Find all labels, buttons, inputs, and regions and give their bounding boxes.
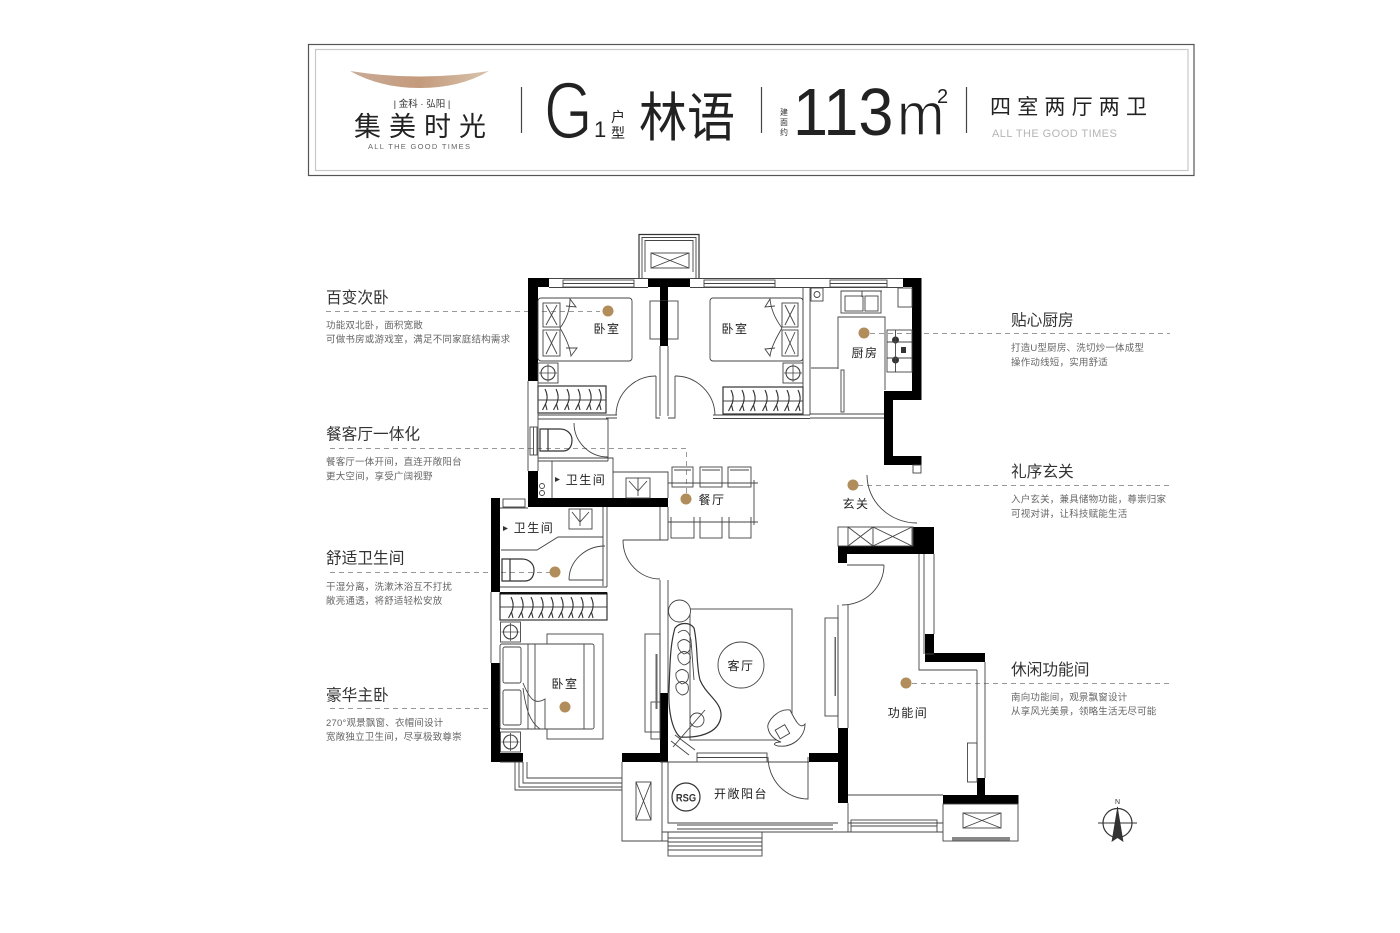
callout: leisure room: 南向功能间，观景飘窗设计	[1011, 692, 1128, 704]
location dots	[550, 306, 912, 712]
side table	[671, 710, 705, 755]
area number: 2	[937, 86, 948, 108]
folded sheet	[560, 299, 577, 356]
rug	[690, 609, 792, 740]
balcony	[622, 753, 943, 856]
room labels: 卧室	[721, 321, 749, 336]
nightstand	[783, 363, 803, 383]
plan code G1: 1	[594, 117, 606, 142]
upper bathroom	[528, 381, 668, 498]
bed	[538, 298, 632, 361]
bed	[500, 644, 594, 729]
room labels: 玄关	[842, 496, 870, 511]
bed	[710, 298, 803, 361]
room circle	[718, 642, 764, 688]
bedroom one furniture	[538, 298, 632, 418]
plan name: 林语	[639, 88, 735, 148]
room labels: 卫生间	[514, 521, 554, 535]
callout: ceremonial entrance: 礼序玄关	[1011, 463, 1074, 481]
pillows	[782, 303, 798, 356]
room labels	[514, 321, 928, 801]
bedroom two furniture	[710, 298, 810, 418]
callout: flexible second bedroom: 可做书房或游戏室，满足不同家庭结构需求	[326, 334, 511, 346]
icon: north compass	[1098, 799, 1137, 842]
callout: flexible second bedroom	[326, 289, 511, 346]
wardrobe	[538, 386, 606, 413]
logo: gold arc	[350, 71, 489, 88]
callout: comfortable bathroom	[326, 550, 452, 607]
icon: north compass: N	[1115, 799, 1120, 806]
area number: 113	[793, 74, 893, 149]
nightstand	[538, 363, 558, 383]
stove	[887, 330, 912, 372]
room labels: 功能间	[888, 706, 928, 720]
living room partition	[500, 540, 668, 762]
area number	[793, 74, 948, 149]
dining set	[668, 467, 758, 538]
armchair	[768, 710, 805, 746]
callout: considerate kitchen: 操作动线短，实用舒适	[1011, 356, 1108, 368]
floor lamp	[668, 600, 690, 622]
callout: comfortable bathroom: 敞亮通透，将舒适轻松安放	[326, 595, 443, 607]
dashed leader lines	[326, 312, 1170, 708]
room labels: 开敞阳台	[714, 786, 768, 801]
callout: considerate kitchen: 贴心厨房	[1011, 312, 1074, 330]
callout: considerate kitchen	[1011, 312, 1144, 368]
wash basin area	[613, 472, 668, 498]
logo: developer line: | 金科 · 弘阳 |	[394, 98, 450, 110]
TV cabinet	[645, 634, 660, 739]
central partition and doors	[616, 301, 715, 418]
callout: leisure room	[1011, 661, 1157, 718]
callout: comfortable bathroom: 舒适卫生间	[326, 550, 404, 568]
shower head	[555, 477, 560, 482]
divider two	[760, 87, 762, 133]
RSG marker	[672, 783, 700, 811]
callout: integrated dining and living	[326, 426, 462, 482]
sliding door	[697, 753, 767, 762]
logo: project name: 集美时光	[354, 112, 494, 142]
callout: luxury master bedroom	[326, 686, 462, 743]
toilet	[540, 429, 572, 451]
southeast air conditioning ledge	[943, 804, 1018, 841]
top chairs	[672, 467, 751, 487]
floor plan	[491, 234, 1018, 856]
callout: luxury master bedroom: 豪华主卧	[326, 686, 389, 704]
area prefix	[780, 107, 788, 137]
room labels: 卫生间	[566, 473, 606, 487]
room labels: 餐厅	[698, 492, 726, 507]
callout: integrated dining and living: 餐客厅一体化	[326, 426, 420, 444]
entry wall details	[838, 465, 921, 546]
plan type label	[611, 109, 625, 141]
divider one	[520, 87, 522, 133]
toilet	[502, 559, 534, 581]
divider three	[966, 87, 968, 133]
plan code G1: G	[544, 67, 593, 156]
callout: luxury master bedroom: 270°观景飘窗、衣帽间设计	[326, 717, 444, 729]
pillows	[543, 303, 560, 356]
bottom chairs	[671, 517, 751, 538]
English tagline: ALL THE GOOD TIMES	[992, 128, 1117, 140]
top windows	[549, 278, 903, 288]
functional room outline	[838, 554, 985, 832]
door	[538, 418, 608, 461]
north air conditioning ledge	[639, 234, 699, 278]
wardrobe	[723, 387, 803, 414]
logo: English slogan: ALL THE GOOD TIMES	[368, 142, 471, 151]
room labels: 卧室	[551, 676, 579, 691]
master bay window	[515, 762, 622, 790]
sofa	[669, 624, 721, 737]
room labels: 卧室	[593, 321, 621, 336]
steps	[668, 832, 762, 856]
nightstands	[500, 622, 520, 752]
callout: ceremonial entrance	[1011, 463, 1167, 520]
sink	[841, 291, 882, 313]
table	[668, 480, 758, 525]
callout: leisure room: 从享风光美景，领略生活无尽可能	[1011, 706, 1157, 718]
room labels: 厨房	[851, 345, 879, 360]
area number: m	[897, 82, 944, 148]
right TV cabinet	[825, 618, 838, 716]
callout: flexible second bedroom: 功能双北卧，面积宽敞	[326, 320, 423, 332]
balcony railing	[662, 825, 943, 832]
swing door	[768, 757, 808, 799]
callout: ceremonial entrance: 可视对讲，让科技赋能生活	[1011, 508, 1128, 520]
master wardrobe	[491, 592, 607, 663]
layout description: 四室两厅两卫	[990, 96, 1153, 119]
master bedroom furniture	[500, 622, 603, 752]
kitchen fixtures	[803, 287, 912, 418]
callout: comfortable bathroom: 干湿分离，洗漱沐浴互不打扰	[326, 581, 452, 593]
header banner	[308, 44, 1194, 176]
callout: integrated dining and living: 更大空间，享受广阔视野	[326, 470, 433, 482]
folded sheet	[765, 299, 782, 356]
callout: integrated dining and living: 餐客厅一体开间，直连开敞阳台	[326, 456, 462, 468]
pillows	[503, 647, 521, 725]
callout: considerate kitchen: 打造U型厨房、洗切炒一体成型	[1011, 342, 1144, 354]
rug	[547, 634, 603, 739]
blanket fold	[523, 683, 545, 729]
callout: ceremonial entrance: 入户玄关，兼具储物功能，尊崇归家	[1011, 494, 1167, 506]
area prefix: 建	[780, 107, 788, 117]
callout: leisure room: 休闲功能间	[1011, 661, 1089, 679]
callout: luxury master bedroom: 宽敞独立卫生间，尽享极致尊崇	[326, 731, 462, 743]
room labels: 客厅	[727, 658, 755, 673]
plan type label: 户	[611, 109, 625, 125]
air conditioner	[636, 782, 651, 820]
living room furniture	[645, 600, 838, 755]
plan type label: 型	[611, 125, 625, 141]
area prefix: 面	[780, 118, 788, 127]
RSG marker: RSG	[676, 793, 696, 805]
structural walls	[491, 278, 1018, 804]
callout: flexible second bedroom: 百变次卧	[326, 289, 389, 307]
lower bathroom	[500, 499, 668, 587]
area prefix: 约	[780, 127, 788, 137]
